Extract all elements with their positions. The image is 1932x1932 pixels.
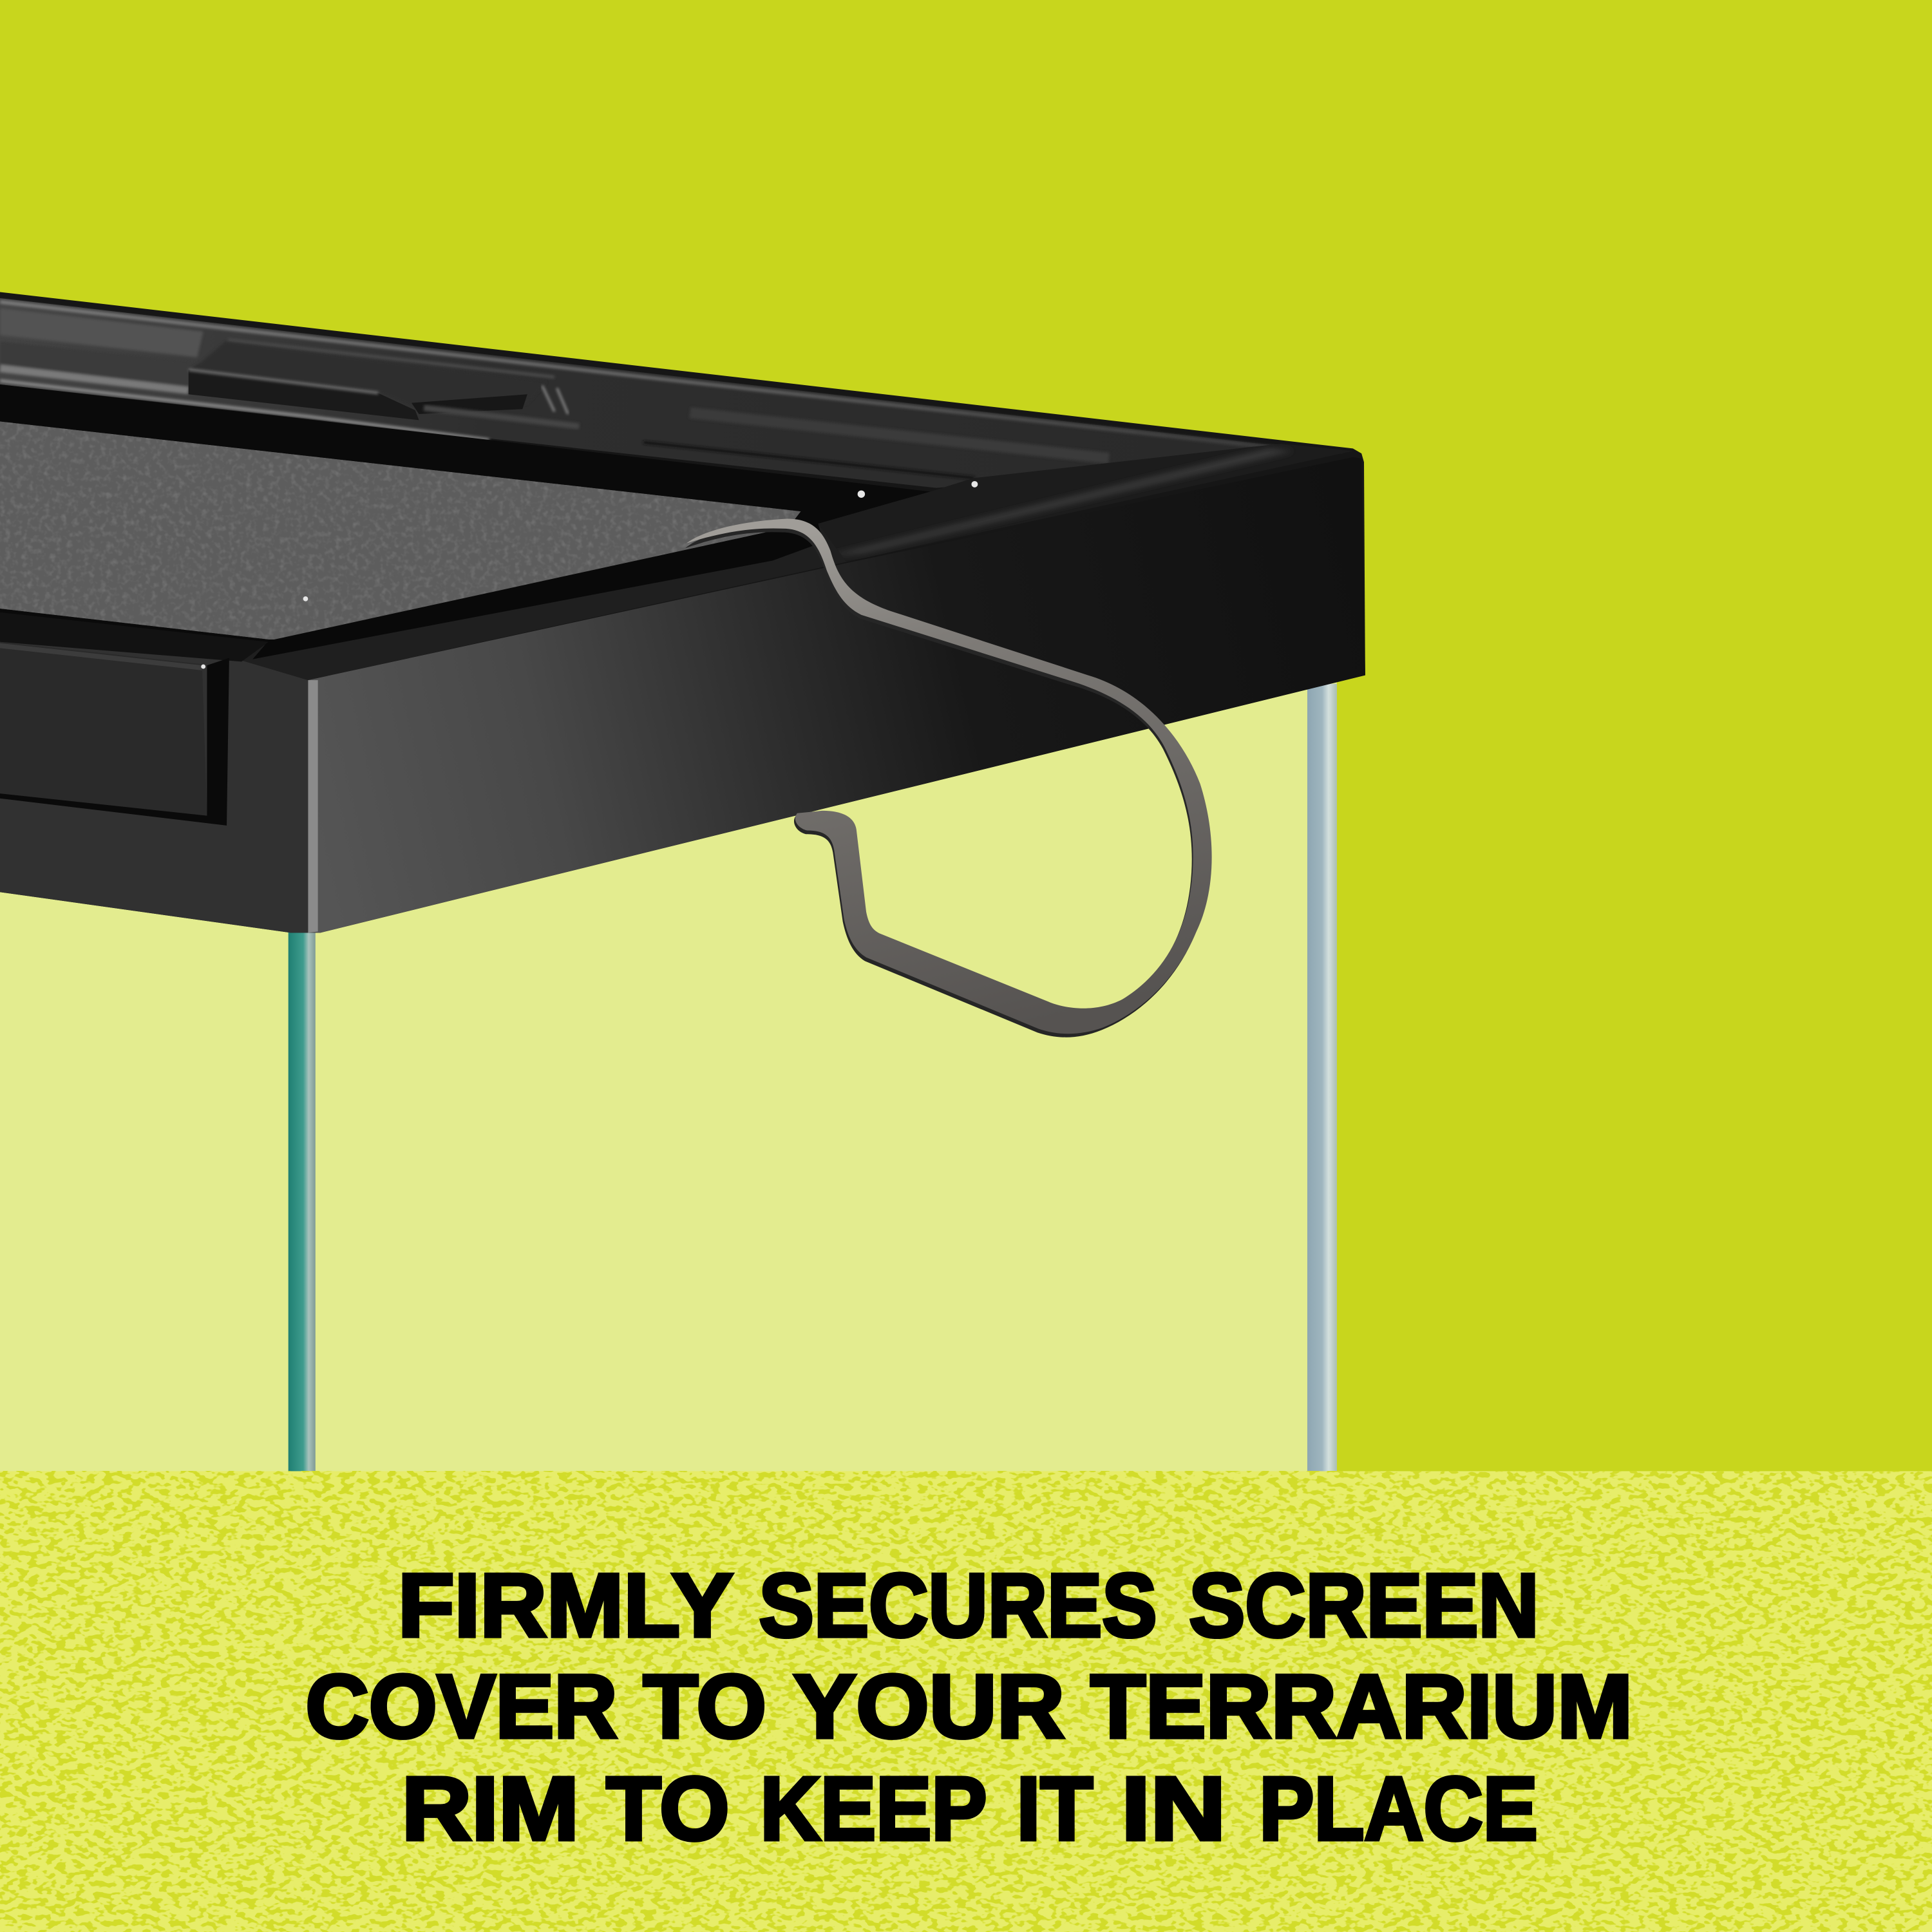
left door panel xyxy=(0,642,207,816)
caption line 3: KEEP xyxy=(760,1759,987,1859)
top rear rail xyxy=(0,298,1343,488)
band base xyxy=(0,1471,1932,1932)
black inner rim xyxy=(0,384,931,643)
front lip xyxy=(242,524,846,680)
caption line 2 xyxy=(305,1656,1633,1757)
rail highlights xyxy=(0,302,1282,478)
clip band xyxy=(687,518,1212,1034)
caption line 2: TERRARIUM xyxy=(1090,1656,1633,1757)
door slit xyxy=(0,658,229,826)
caption line 1: SCREEN xyxy=(1189,1555,1539,1656)
right top rail xyxy=(818,444,1353,562)
rivets xyxy=(201,481,978,669)
terrarium glass interior xyxy=(0,677,1337,1472)
caption line 3 xyxy=(402,1759,1538,1859)
caption line 2: COVER xyxy=(305,1656,618,1757)
corner highlight xyxy=(308,680,318,933)
caption line 2: YOUR xyxy=(793,1656,1065,1757)
metal clip xyxy=(685,518,1212,1037)
caption line 1: FIRMLY xyxy=(398,1555,733,1656)
caption line 1 xyxy=(398,1555,1539,1656)
rim sheen xyxy=(823,448,1294,557)
left front face xyxy=(0,641,308,933)
caption xyxy=(305,1555,1633,1859)
screen cover frame xyxy=(0,292,1365,933)
caption line 3: PLACE xyxy=(1259,1759,1538,1859)
frame silhouette xyxy=(0,292,1365,933)
left rim strip xyxy=(0,612,269,661)
caption line 1: SECURES xyxy=(759,1555,1157,1656)
caption line 2: TO xyxy=(643,1656,766,1757)
mesh screen xyxy=(0,419,813,643)
caption line 3: RIM xyxy=(402,1759,579,1859)
caption line 3: IN xyxy=(1121,1759,1226,1859)
clip underside shadow xyxy=(685,521,1211,1037)
right front face xyxy=(308,457,1365,933)
text band xyxy=(0,1471,1932,1932)
caption line 3: TO xyxy=(606,1759,730,1859)
left glass edge xyxy=(289,931,316,1472)
lip shadow xyxy=(252,524,823,659)
right glass edge xyxy=(1307,684,1337,1472)
band texture xyxy=(0,1471,1932,1932)
caption line 3: IT xyxy=(1016,1759,1093,1859)
latch xyxy=(189,341,579,426)
